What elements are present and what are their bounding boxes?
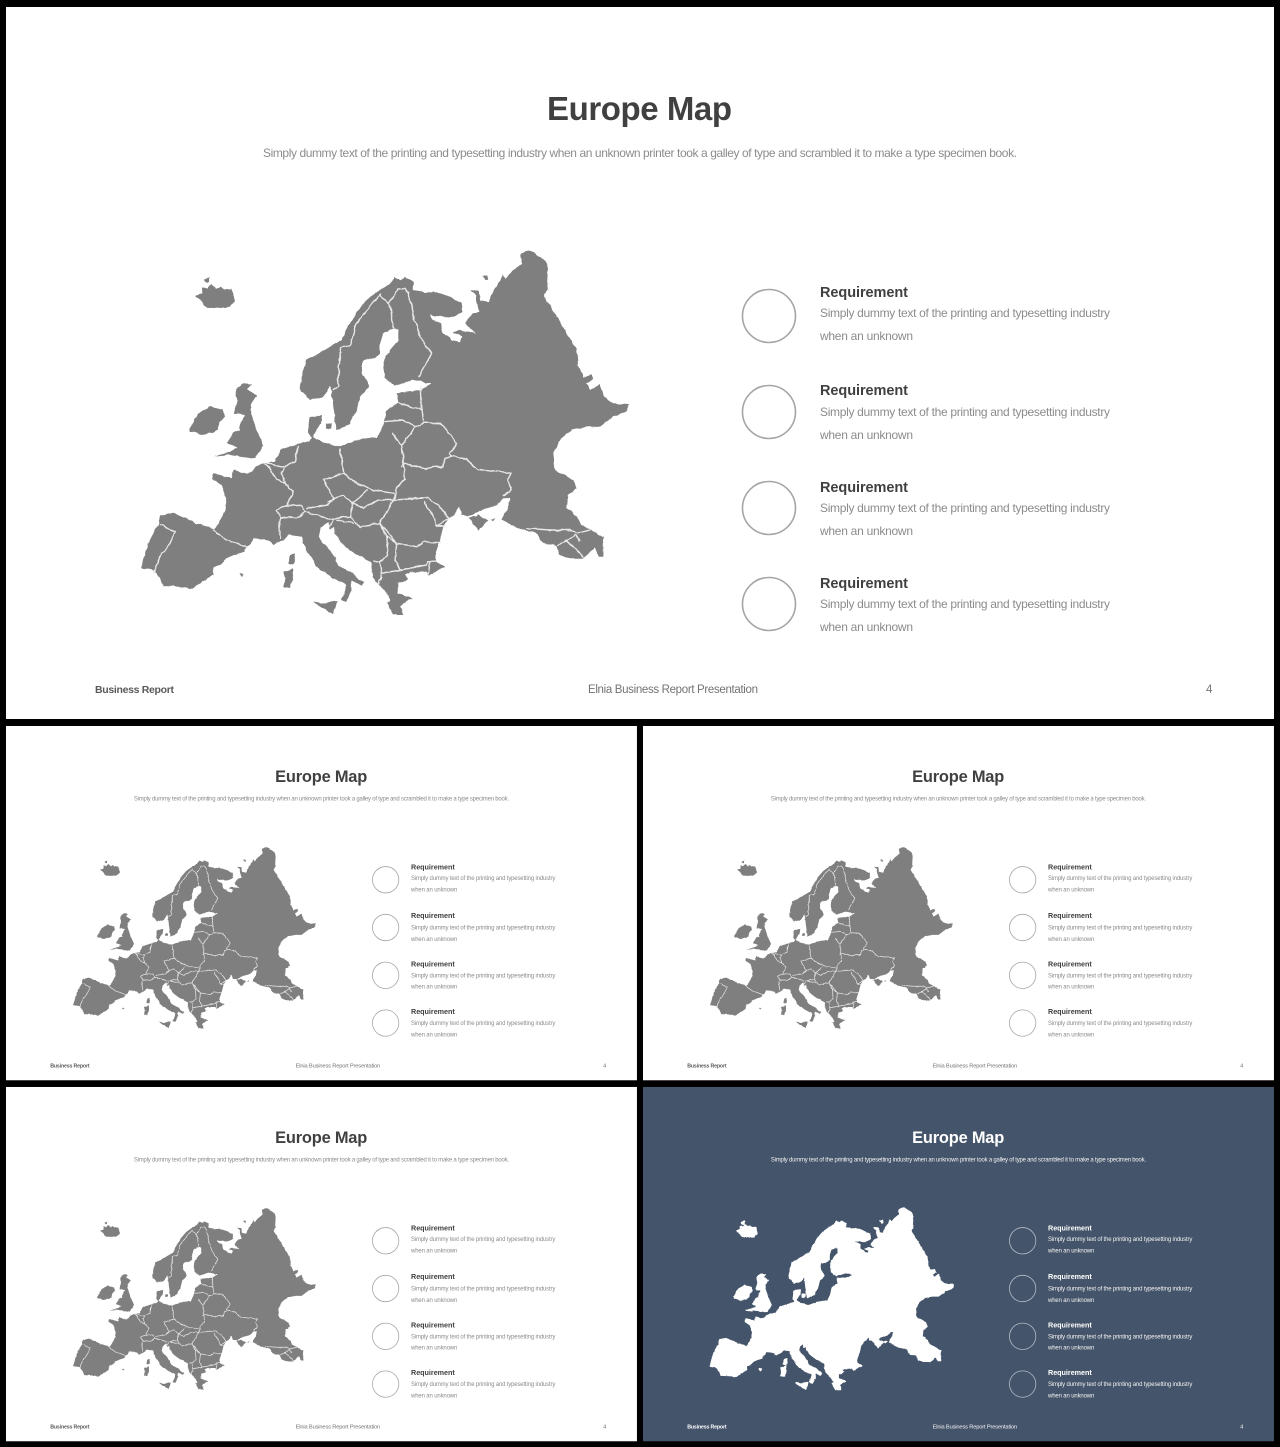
list item 1: Simply dummy text of the printing and typesetting industry [411, 1237, 555, 1243]
list item 1: Requirement [411, 1223, 455, 1232]
list item 2: Requirement [1048, 1272, 1092, 1281]
list item 2: Simply dummy text of the printing and typesetting industry [1048, 926, 1192, 932]
footer [50, 1424, 607, 1430]
list item 4: Requirement [820, 576, 908, 592]
list item 2: Requirement [1048, 911, 1092, 920]
footer [687, 1424, 1244, 1430]
subtitle: Simply dummy text of the printing and typesetting industry when an unknown printer took a galley of type and scrambled it to make a type specimen book. [771, 1158, 1146, 1164]
list item 1: Requirement [820, 285, 908, 301]
footer: Elnia Business Report Presentation [933, 1063, 1017, 1069]
list item 4: Simply dummy text of the printing and typesetting industry [820, 597, 1110, 611]
footer: 4 [1206, 684, 1213, 696]
list item 1: Simply dummy text of the printing and typesetting industry [411, 876, 555, 882]
list item 3 [372, 1320, 555, 1352]
footer: Elnia Business Report Presentation [588, 684, 758, 696]
list item 3: when an unknown [410, 1346, 457, 1352]
list item 2 [742, 383, 1110, 442]
list item 3: Simply dummy text of the printing and typesetting industry [820, 501, 1110, 515]
list item 3: Requirement [1048, 1320, 1092, 1329]
list item 3 [1009, 1320, 1192, 1352]
list item 1 [372, 862, 555, 894]
list item 3: Simply dummy text of the printing and typesetting industry [1048, 973, 1192, 979]
list item 3 [372, 959, 555, 991]
map of Europe [142, 250, 630, 615]
list item 4 [372, 1368, 555, 1399]
list item 2: when an unknown [410, 937, 457, 943]
list item 2 [1009, 1272, 1192, 1304]
list item 1: Simply dummy text of the printing and typesetting industry [1048, 1237, 1192, 1243]
list item 3: Simply dummy text of the printing and typesetting industry [1048, 1334, 1192, 1340]
list item 3 [742, 480, 1110, 538]
list item 4: when an unknown [410, 1032, 457, 1038]
list item 3: Requirement [411, 1320, 455, 1329]
list item 3: Requirement [820, 480, 908, 496]
map of Europe [74, 847, 316, 1029]
list item 2 [1009, 911, 1192, 943]
list item 4: Requirement [1048, 1368, 1092, 1377]
list item 1: Simply dummy text of the printing and typesetting industry [1048, 876, 1192, 882]
footer [95, 684, 1213, 696]
list item 1: Requirement [411, 862, 455, 871]
list item 2: when an unknown [819, 428, 913, 442]
list item 2 [372, 1272, 555, 1304]
title: Europe Map [275, 768, 367, 786]
list item 3: when an unknown [410, 985, 457, 991]
list item 4 [742, 576, 1110, 634]
map of Europe, white [711, 1208, 953, 1390]
footer: 4 [1240, 1063, 1244, 1069]
list item 4: when an unknown [819, 620, 913, 634]
list item 4: Requirement [411, 1368, 455, 1377]
list item 4 [1009, 1007, 1192, 1038]
list item 1: when an unknown [819, 329, 913, 343]
list item 3: Simply dummy text of the printing and typesetting industry [411, 973, 555, 979]
list item 2: when an unknown [1047, 1298, 1094, 1304]
map of Europe [74, 1208, 316, 1390]
footer: Business Report [95, 684, 174, 696]
footer: Business Report [50, 1063, 90, 1069]
title: Europe Map [912, 768, 1004, 786]
subtitle: Simply dummy text of the printing and typesetting industry when an unknown printer took a galley of type and scrambled it to make a type specimen book. [134, 797, 509, 803]
list item 2: Simply dummy text of the printing and typesetting industry [411, 926, 555, 932]
list item 4: when an unknown [1047, 1032, 1094, 1038]
footer: Business Report [50, 1424, 90, 1430]
panel: thumbnail top right [643, 726, 1274, 1080]
subtitle: Simply dummy text of the printing and typesetting industry when an unknown printer took a galley of type and scrambled it to make a type specimen book. [771, 797, 1146, 803]
list item 2: Requirement [411, 1272, 455, 1281]
list item 1 [1009, 1223, 1192, 1255]
list item 4: when an unknown [410, 1393, 457, 1399]
panel: thumbnail bottom left [6, 1087, 637, 1441]
list item 2 [372, 911, 555, 943]
list item 2: Requirement [820, 383, 908, 399]
panel: main slide [6, 7, 1274, 719]
map of Europe [711, 847, 953, 1029]
title: Europe Map [275, 1129, 367, 1147]
list item 4: Simply dummy text of the printing and typesetting industry [1048, 1382, 1192, 1388]
title: Europe Map [547, 90, 732, 127]
title: Europe Map [912, 1129, 1004, 1147]
list item 3 [1009, 959, 1192, 991]
list item 1: Requirement [1048, 862, 1092, 871]
list item 1: when an unknown [410, 888, 457, 894]
list item 3: Requirement [411, 959, 455, 968]
list item 4 [372, 1007, 555, 1038]
footer [50, 1063, 607, 1069]
list item 2: when an unknown [410, 1298, 457, 1304]
footer: Elnia Business Report Presentation [296, 1424, 380, 1430]
panel: thumbnail bottom right, dark [643, 1087, 1274, 1441]
footer: Elnia Business Report Presentation [296, 1063, 380, 1069]
list item 2: Simply dummy text of the printing and typesetting industry [1048, 1287, 1192, 1293]
list item 4 [1009, 1368, 1192, 1399]
footer: Business Report [687, 1063, 727, 1069]
list item 4: Requirement [1048, 1007, 1092, 1016]
list item 1: when an unknown [410, 1249, 457, 1255]
footer: 4 [603, 1063, 607, 1069]
list item 4: Simply dummy text of the printing and typesetting industry [1048, 1021, 1192, 1027]
list item 4: Simply dummy text of the printing and typesetting industry [411, 1021, 555, 1027]
footer: 4 [603, 1424, 607, 1430]
list item 4: when an unknown [1047, 1393, 1094, 1399]
list item 1: Requirement [1048, 1223, 1092, 1232]
list item 1 [1009, 862, 1192, 894]
list item 1: Simply dummy text of the printing and typesetting industry [820, 306, 1110, 320]
list item 2: when an unknown [1047, 937, 1094, 943]
list item 3: when an unknown [819, 524, 913, 538]
list item 3: when an unknown [1047, 985, 1094, 991]
footer: Elnia Business Report Presentation [933, 1424, 1017, 1430]
list item 1 [372, 1223, 555, 1255]
subtitle: Simply dummy text of the printing and typesetting industry when an unknown printer took a galley of type and scrambled it to make a type specimen book. [134, 1158, 509, 1164]
panel: thumbnail top left [6, 726, 637, 1080]
list item 1: when an unknown [1047, 1249, 1094, 1255]
list item 4: Simply dummy text of the printing and typesetting industry [411, 1382, 555, 1388]
list item 4: Requirement [411, 1007, 455, 1016]
footer: 4 [1240, 1424, 1244, 1430]
list item 2: Simply dummy text of the printing and typesetting industry [411, 1287, 555, 1293]
list item 2: Requirement [411, 911, 455, 920]
list item 3: Simply dummy text of the printing and typesetting industry [411, 1334, 555, 1340]
list item 3: Requirement [1048, 959, 1092, 968]
list item 1: when an unknown [1047, 888, 1094, 894]
subtitle: Simply dummy text of the printing and typesetting industry when an unknown printer took a galley of type and scrambled it to make a type specimen book. [263, 146, 1017, 160]
list item 1 [742, 285, 1110, 343]
footer [687, 1063, 1244, 1069]
list item 3: when an unknown [1047, 1346, 1094, 1352]
footer: Business Report [687, 1424, 727, 1430]
list item 2: Simply dummy text of the printing and typesetting industry [820, 405, 1110, 419]
